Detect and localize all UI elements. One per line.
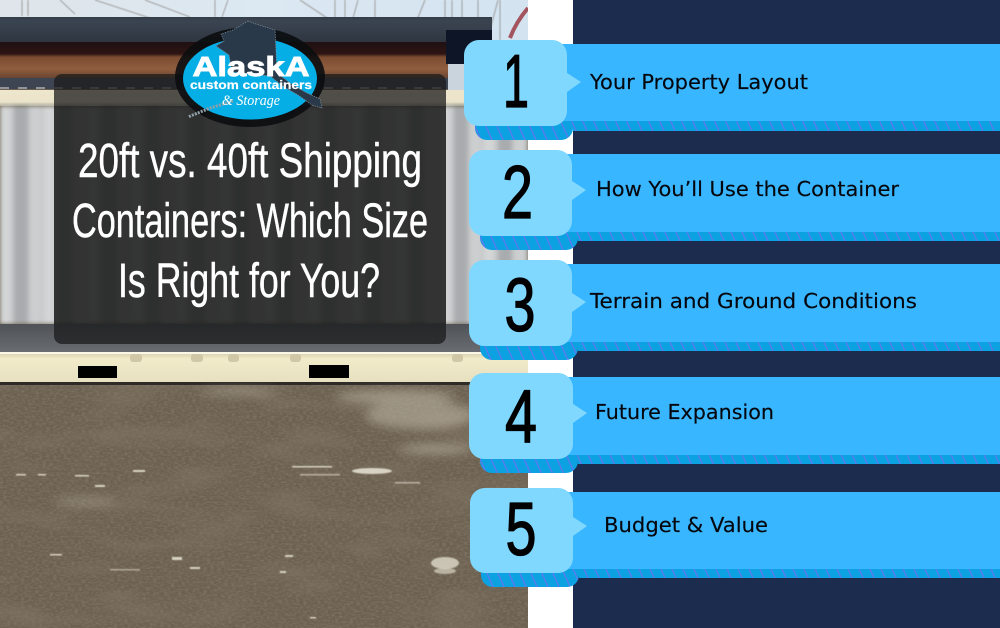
item 4: Future Expansion <box>469 373 1000 473</box>
title: 20ft vs. 40ft Shipping <box>78 135 422 188</box>
item 5: Budget & Value <box>470 487 1000 587</box>
icon: Alaska silhouette <box>188 21 322 117</box>
item 5: Budget & Value: Budget & Value <box>604 513 768 537</box>
item 1: Your Property Layout: Your Property Layout <box>589 70 808 94</box>
item 4: Future Expansion: 4 <box>505 374 537 458</box>
navy right panel <box>573 0 1000 628</box>
item 3: Terrain and Ground Conditions: 3 <box>504 263 536 347</box>
item 1: Your Property Layout <box>464 39 1000 140</box>
white divider strip <box>528 0 573 628</box>
logo text: custom containers <box>190 78 312 92</box>
gravel ground <box>0 385 528 628</box>
item 3: Terrain and Ground Conditions <box>469 260 1000 360</box>
logo text <box>190 51 312 109</box>
title: Is Right for You? <box>118 255 380 308</box>
item 2: How You'll Use the Container: How You’ll Use the Container <box>596 177 900 201</box>
title: Containers: Which Size <box>72 195 428 248</box>
item 1: Your Property Layout: 1 <box>503 39 529 123</box>
item 3: Terrain and Ground Conditions: Terrain and Ground Conditions <box>589 289 917 313</box>
item 5: Budget & Value: 5 <box>506 487 536 571</box>
container base slots <box>78 365 349 378</box>
logo: Alaska Custom Containers & Storage <box>175 21 325 127</box>
item 4: Future Expansion: Future Expansion <box>595 400 774 424</box>
background photo: shipping container <box>0 0 528 628</box>
dark title panel <box>54 74 446 344</box>
item 2: How You'll Use the Container <box>469 150 1000 250</box>
logo text: AlaskA <box>192 51 310 82</box>
item 2: How You'll Use the Container: 2 <box>502 150 533 234</box>
title <box>72 135 428 308</box>
logo text: & Storage <box>222 93 280 109</box>
